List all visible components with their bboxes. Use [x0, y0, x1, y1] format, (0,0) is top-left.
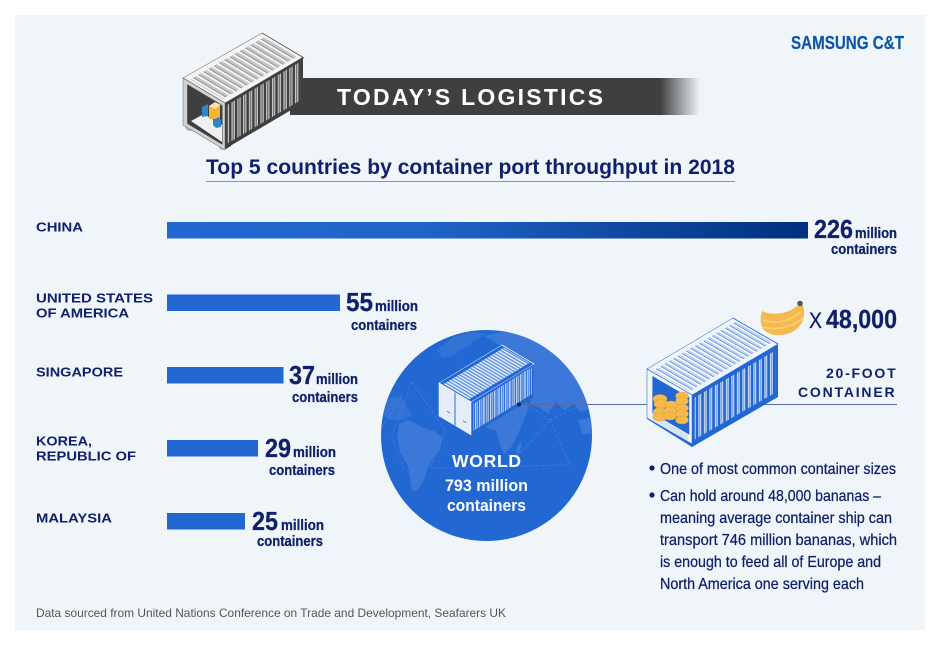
- bullet list: container facts: is enough to feed all of Europe and: [660, 554, 881, 571]
- row: China: containers: [831, 242, 897, 258]
- bullet list: container facts: [649, 461, 897, 593]
- row: United States of America: UNITED STATES: [36, 290, 153, 306]
- row: United States of America: 55: [346, 289, 373, 317]
- label: 20-foot container: 20-FOOT: [826, 365, 897, 381]
- bullet list: container facts: North America one serving each: [660, 576, 864, 593]
- logo: Samsung C&T: SAMSUNG C&T: [791, 32, 905, 53]
- bullet list: container facts: Can hold around 48,000 bananas –: [660, 488, 881, 505]
- label: 20-foot container: CONTAINER: [798, 384, 896, 400]
- row: Singapore: 37: [289, 362, 315, 390]
- bananas inside container: [653, 392, 688, 424]
- row: China: CHINA: [36, 220, 84, 234]
- row: Malaysia: [36, 508, 324, 550]
- title text: TODAY’S LOGISTICS: [337, 84, 603, 110]
- row: Malaysia: 25: [252, 508, 278, 536]
- bullet list: container facts: meaning average container ship can: [660, 510, 892, 527]
- row: Korea: 29: [265, 435, 291, 463]
- row: China: 226: [814, 216, 853, 244]
- globe label: WORLD: [452, 451, 521, 471]
- bar chart: container port throughput: [36, 216, 897, 550]
- icon: blue container with bananas: [647, 318, 778, 447]
- row: Singapore: containers: [292, 390, 358, 406]
- label: 20-foot container: [798, 365, 897, 400]
- row: Malaysia: MALAYSIA: [36, 510, 113, 526]
- row: Malaysia: containers: [257, 534, 323, 550]
- row: China: [36, 216, 897, 258]
- icon: banana bunch: [761, 301, 804, 335]
- bullet list: container facts: One of most common container sizes: [660, 461, 896, 478]
- chart heading: Top 5 countries by container port throughput in 2018: [206, 156, 735, 179]
- connector line: world to 20-foot container: [517, 402, 897, 406]
- title banner: [290, 78, 700, 115]
- row: Korea: million: [293, 445, 336, 461]
- multiplier: x 48,000: X: [809, 308, 822, 333]
- row: United States of America: [36, 289, 418, 334]
- row: United States of America: containers: [351, 318, 417, 334]
- bullet list: container facts: transport 746 million bananas, which: [660, 532, 897, 549]
- row: Malaysia: million: [281, 518, 324, 534]
- globe label: 793 million: [445, 476, 528, 495]
- row: China: million: [855, 226, 897, 242]
- row: Korea: REPUBLIC OF: [36, 448, 136, 464]
- row: Singapore: [36, 362, 358, 406]
- globe label: [445, 451, 528, 515]
- row: United States of America: million: [375, 299, 418, 315]
- multiplier: x 48,000: 48,000: [826, 304, 897, 334]
- row: Singapore: SINGAPORE: [36, 364, 123, 380]
- globe: world total: [378, 330, 594, 541]
- row: United States of America: OF AMERICA: [36, 306, 130, 320]
- icon: white outline container on globe: [439, 345, 534, 435]
- source note: Data sourced from United Nations Conference on Trade and Development, Seafarers UK: [36, 606, 506, 620]
- row: Singapore: million: [316, 372, 358, 388]
- icon: grey open container: [183, 33, 304, 150]
- row: Korea: KOREA,: [36, 434, 92, 448]
- row: Korea: containers: [269, 463, 335, 479]
- globe label: containers: [447, 496, 526, 515]
- row: Korea: [36, 434, 336, 479]
